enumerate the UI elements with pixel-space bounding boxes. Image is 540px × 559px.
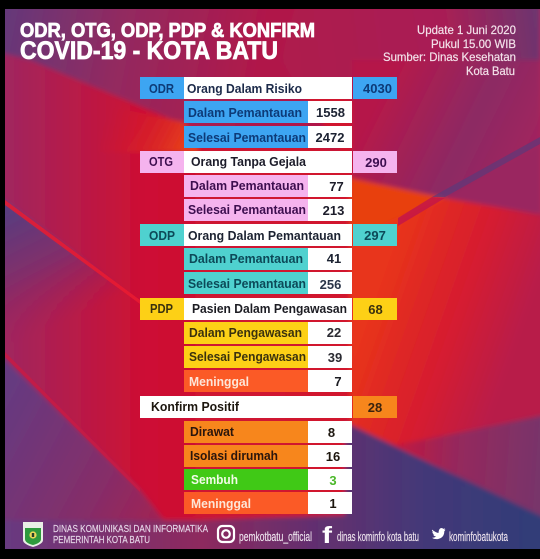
PDP header row: PDP [150,301,173,316]
Konfirm: isolasi dirumah: 16 [326,449,340,464]
icon: facebook: f [322,522,332,548]
PDP header row [140,298,397,320]
ODR header row: ODR [149,81,175,96]
ODR: selesai pemantauan: Selesai Pemantauan [188,130,306,145]
ODP: selesai pemantauan: Selesai Pemantauan [188,276,306,291]
PDP: dalam pengawasan: 22 [327,325,341,340]
streak and diagonal highlights [5,137,540,492]
PDP header row: Pasien Dalam Pengawasan [192,301,347,316]
update and source info: Update 1 Juni 2020 [417,23,516,37]
ODR header row: Orang Dalam Risiko [187,81,302,96]
PDP: selesai pengawasan: 39 [328,350,342,365]
ODR: dalam pemantauan: 1558 [316,105,345,120]
update and source info: Kota Batu [466,64,515,78]
OTG header row [140,151,397,173]
Konfirm: dirawat [184,421,352,443]
ODR: dalam pemantauan: Dalam Pemantauan [188,105,302,120]
title: ODR, OTG, ODP, PDP & KONFIRM [20,19,315,42]
Konfirm header row: Konfirm Positif [151,399,240,414]
instagram handle: pemkotbatu_official [239,529,312,544]
ODP: dalam pemantauan: Dalam Pemantauan [189,251,303,266]
Konfirm: dirawat: 8 [328,425,335,440]
Konfirm header row: 28 [368,400,382,415]
ODR header row [140,77,397,99]
Konfirm: isolasi dirumah [184,445,352,467]
ODP header row: 297 [364,228,386,243]
icon: Kota Batu shield [23,522,43,547]
agency name [53,524,208,546]
Konfirm: meninggal: Meninggal [191,496,251,511]
ODR: dalam pemantauan [184,101,352,123]
panel: OTG [140,151,397,221]
footer [23,522,508,548]
title [20,19,315,65]
Konfirm: sembuh: 3 [329,473,337,488]
PDP: meninggal: 7 [334,374,342,389]
PDP: selesai pengawasan: Selesai Pengawasan [189,349,306,364]
PDP: meninggal [184,370,352,392]
icon: instagram [218,526,234,542]
OTG: selesai pemantauan: 213 [323,203,344,218]
panel: Konfirm Positif [140,396,397,514]
update and source info [383,23,516,78]
PDP: meninggal: Meninggal [189,374,249,389]
panel: ODR [140,77,397,148]
ODR: selesai pemantauan: 2472 [316,130,344,145]
ODP: dalam pemantauan [184,248,352,270]
ODR: selesai pemantauan [184,126,352,148]
ODR header row: 4030 [363,81,392,96]
Konfirm: sembuh: Sembuh [191,472,238,487]
Konfirm: dirawat: Dirawat [190,424,235,439]
Konfirm header row [140,396,397,418]
ODP header row: Orang Dalam Pemantauan [188,228,341,243]
Konfirm: isolasi dirumah: Isolasi dirumah [190,448,278,463]
panel: PDP [140,298,397,392]
title: COVID-19 - KOTA BATU [20,37,278,65]
PDP header row: 68 [368,302,383,317]
PDP: dalam pengawasan: Dalam Pengawasan [189,325,302,340]
PDP: dalam pengawasan [184,322,352,344]
facebook handle: dinas kominfo kota batu [337,529,419,544]
OTG: dalam pemantauan: 77 [329,179,344,194]
ODP: selesai pemantauan [184,272,352,294]
update and source info: Pukul 15.00 WIB [431,37,516,51]
Konfirm: meninggal: 1 [329,496,337,511]
OTG: dalam pemantauan: Dalam Pemantauan [190,178,304,193]
agency name: PEMERINTAH KOTA BATU [53,535,150,546]
ODP header row [140,224,397,246]
ODP header row: ODP [149,228,175,243]
panel: ODP [140,224,397,294]
OTG: selesai pemantauan [184,199,352,221]
update and source info: Sumber: Dinas Kesehatan [383,50,516,64]
OTG: dalam pemantauan [184,175,352,197]
Konfirm: sembuh [184,469,352,490]
OTG header row: Orang Tanpa Gejala [191,154,307,169]
PDP: selesai pengawasan [184,346,352,368]
OTG header row: 290 [365,155,387,170]
ODP: dalam pemantauan: 41 [327,251,341,266]
OTG header row: OTG [149,154,173,169]
ODP: selesai pemantauan: 256 [320,277,341,292]
agency name: DINAS KOMUNIKASI DAN INFORMATIKA [53,524,208,535]
Konfirm: meninggal [184,492,352,514]
OTG: selesai pemantauan: Selesai Pemantauan [188,202,306,217]
icon: twitter [432,528,446,539]
